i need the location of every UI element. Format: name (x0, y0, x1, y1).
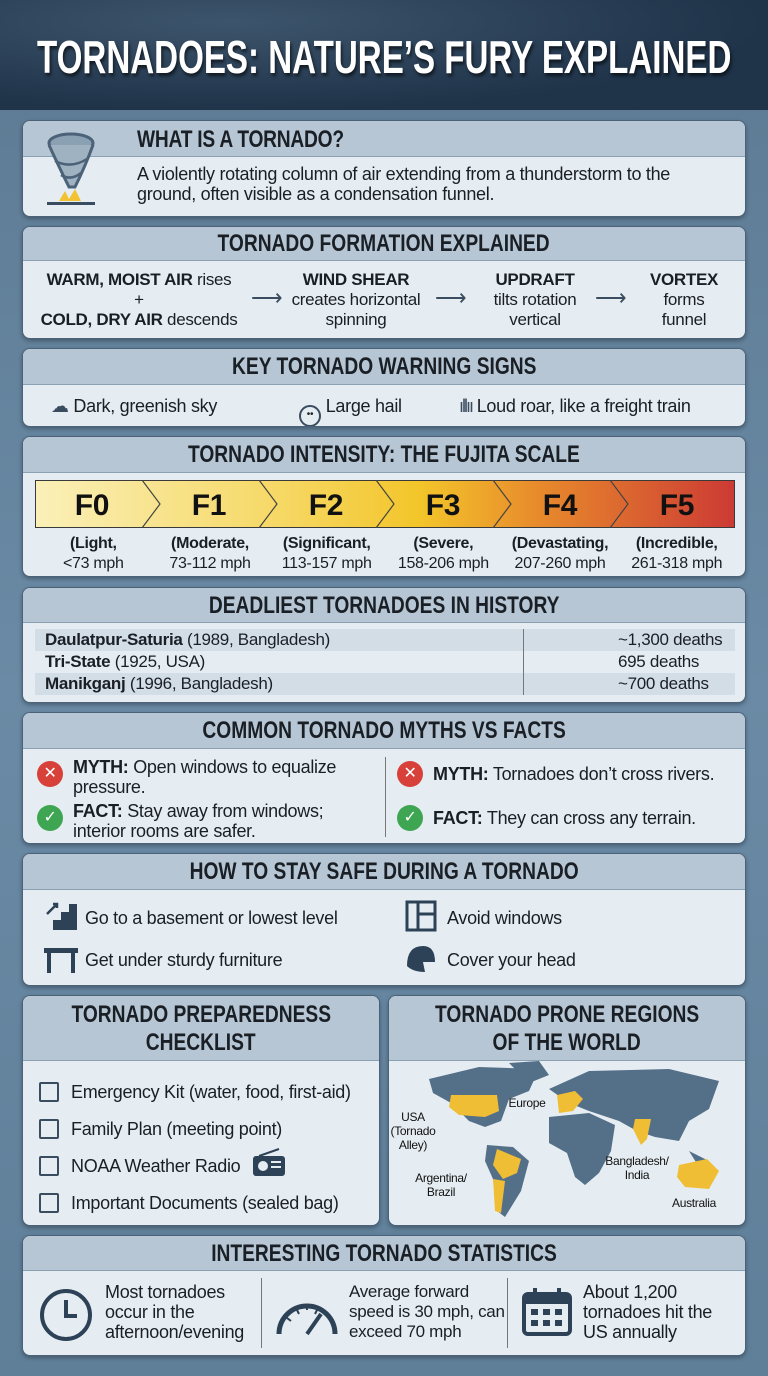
scale labels (63, 535, 722, 572)
panel: prone regions: TORNADO PRONE REGIONS (435, 1001, 699, 1028)
sign: roar: ıllıı Loud roar, like a freight train (459, 396, 691, 416)
tip: head: Cover your head (447, 950, 576, 970)
scale bar (35, 480, 735, 528)
stat: time: Most tornadoes occur in the afternoon/evening (105, 1282, 244, 1342)
step 3 (494, 270, 576, 329)
fact 2: FACT: They can cross any terrain. (433, 808, 696, 828)
scale bar: F1 (192, 489, 226, 522)
scale labels: 261-318 mph (631, 555, 722, 572)
world map: (Tornado (391, 1124, 436, 1138)
step 1 (41, 270, 238, 329)
table: ~1,300 deaths (618, 630, 722, 649)
divider (261, 1278, 262, 1348)
tip: furniture: Get under sturdy furniture (85, 950, 282, 970)
scale labels: (Severe, (413, 535, 473, 552)
panel: formation: TORNADO FORMATION EXPLAINED (218, 230, 550, 257)
panel: myths vs facts (22, 712, 746, 844)
arrow: ⟶ (595, 285, 626, 310)
panel: what is a tornado (22, 120, 746, 217)
table: Manikganj (1996, Bangladesh) (45, 674, 273, 693)
fact 1: FACT: Stay away from windows; interior rooms are safer. (73, 801, 323, 841)
sign: hail: Large hail (326, 396, 402, 416)
tip: windows: Avoid windows (447, 908, 562, 928)
scale labels: (Significant, (283, 535, 370, 552)
checklist items: Family Plan (meeting point) (71, 1119, 282, 1139)
step 3: UPDRAFT (495, 270, 575, 289)
step 4 (650, 270, 718, 329)
checklist items (39, 1082, 351, 1213)
scale labels: 207-260 mph (515, 555, 606, 572)
panel: stay safe: HOW TO STAY SAFE DURING A TORNADO (189, 858, 578, 885)
panel: statistics (22, 1235, 746, 1356)
panel: checklist (22, 995, 380, 1226)
scale labels: (Moderate, (171, 535, 249, 552)
stat: time (40, 1282, 244, 1342)
panel: deadliest: DEADLIEST TORNADOES IN HISTORY (209, 592, 559, 619)
world map (391, 1061, 719, 1217)
fact 2 (397, 805, 696, 831)
myth 2: MYTH: Tornadoes don’t cross rivers. (433, 764, 714, 784)
icon: tornado (47, 132, 95, 205)
scale labels: <73 mph (63, 555, 124, 572)
checklist items: Important Documents (sealed bag) (71, 1193, 339, 1213)
step 4: forms (663, 290, 704, 309)
scale labels: 113-157 mph (282, 555, 372, 572)
world map: India (625, 1168, 650, 1182)
scale labels: 158-206 mph (398, 555, 489, 572)
table: Daulatpur-Saturia (1989, Bangladesh) (45, 630, 330, 649)
tip: windows (406, 900, 562, 932)
myth 2 (397, 761, 714, 787)
panel: formation (22, 226, 746, 339)
world map: Australia (672, 1196, 717, 1210)
stat: speed: Average forward speed is 30 mph, can exceed 70 mph (349, 1282, 505, 1341)
scale bar: F5 (660, 489, 694, 522)
step 1: WARM, MOIST AIR rises (47, 270, 231, 289)
checklist items: NOAA Weather Radio (71, 1156, 240, 1176)
world map: USA (401, 1110, 425, 1124)
scale labels: (Devastating, (512, 535, 608, 552)
scale bar: F0 (75, 489, 109, 522)
panel: checklist: TORNADO PREPAREDNESS (71, 1001, 331, 1028)
panel: myths vs facts: COMMON TORNADO MYTHS VS FACTS (202, 717, 566, 744)
scale labels: (Incredible, (636, 535, 718, 552)
arrow: ⟶ (251, 285, 282, 310)
tip: head (407, 946, 576, 972)
scale bar: F3 (426, 489, 460, 522)
scale bar: F2 (309, 489, 343, 522)
step 2: creates horizontal spinning (292, 290, 420, 329)
fact 2: ✓ (403, 809, 417, 826)
panel: fujita scale: TORNADO INTENSITY: THE FUJITA SCALE (188, 441, 580, 468)
stat: annual (522, 1282, 712, 1342)
heading: WHAT IS A TORNADO? (137, 126, 344, 153)
scale labels: 73-112 mph (169, 555, 251, 572)
arrow: ⟶ (435, 285, 466, 310)
table (35, 629, 735, 695)
world map: Bangladesh/ (605, 1154, 670, 1168)
sign: hail (299, 396, 402, 426)
myth 1: ✕ (43, 765, 57, 782)
step 2: WIND SHEAR (303, 270, 409, 289)
step 1: COLD, DRY AIR descends (41, 310, 237, 329)
scale labels: (Light, (70, 535, 117, 552)
panel: warning signs (22, 348, 746, 427)
header (0, 0, 768, 110)
world map: Alley) (399, 1138, 427, 1152)
table: 695 deaths (618, 652, 699, 671)
panel: statistics: INTERESTING TORNADO STATISTICS (211, 1240, 557, 1267)
stat: speed (276, 1282, 505, 1341)
checklist items: Emergency Kit (water, food, first-aid) (71, 1082, 351, 1102)
world map: Brazil (427, 1185, 455, 1199)
table: Tri-State (1925, USA) (45, 652, 205, 671)
panel: fujita scale (22, 436, 746, 577)
fact 1: ✓ (43, 809, 57, 826)
divider (507, 1278, 508, 1348)
tip: basement: Go to a basement or lowest level (85, 908, 338, 928)
scale bar: F4 (543, 489, 578, 522)
step 1: + (134, 290, 144, 309)
stat: annual: About 1,200 tornadoes hit the US annually (583, 1282, 712, 1342)
world map: Argentina/ (415, 1171, 468, 1185)
title: TORNADOES: NATURE’S FURY EXPLAINED (37, 31, 731, 83)
sign: hail: •• (307, 409, 313, 420)
panel: deadliest (22, 587, 746, 703)
panel: warning signs: KEY TORNADO WARNING SIGNS (232, 353, 536, 380)
panel: stay safe (22, 853, 746, 986)
myth 1: MYTH: Open windows to equalize pressure. (73, 757, 336, 797)
text: A violently rotating column of air extending from a thunderstorm to the ground, often visible as a condensation funnel. (137, 164, 670, 204)
step 4: VORTEX (650, 270, 718, 289)
sign: sky: ☁ Dark, greenish sky (51, 396, 217, 416)
table: ~700 deaths (618, 674, 709, 693)
divider (385, 757, 386, 837)
step 4: funnel (662, 310, 706, 329)
step 2 (292, 270, 420, 329)
panel: prone regions (388, 995, 746, 1226)
tip: furniture (44, 948, 282, 973)
myth 2: ✕ (403, 765, 417, 782)
tip: basement (46, 902, 338, 930)
step 3: tilts rotation vertical (494, 290, 576, 329)
panel: checklist: CHECKLIST (146, 1029, 256, 1056)
world map: Europe (509, 1096, 546, 1110)
panel: prone regions: OF THE WORLD (493, 1029, 641, 1056)
